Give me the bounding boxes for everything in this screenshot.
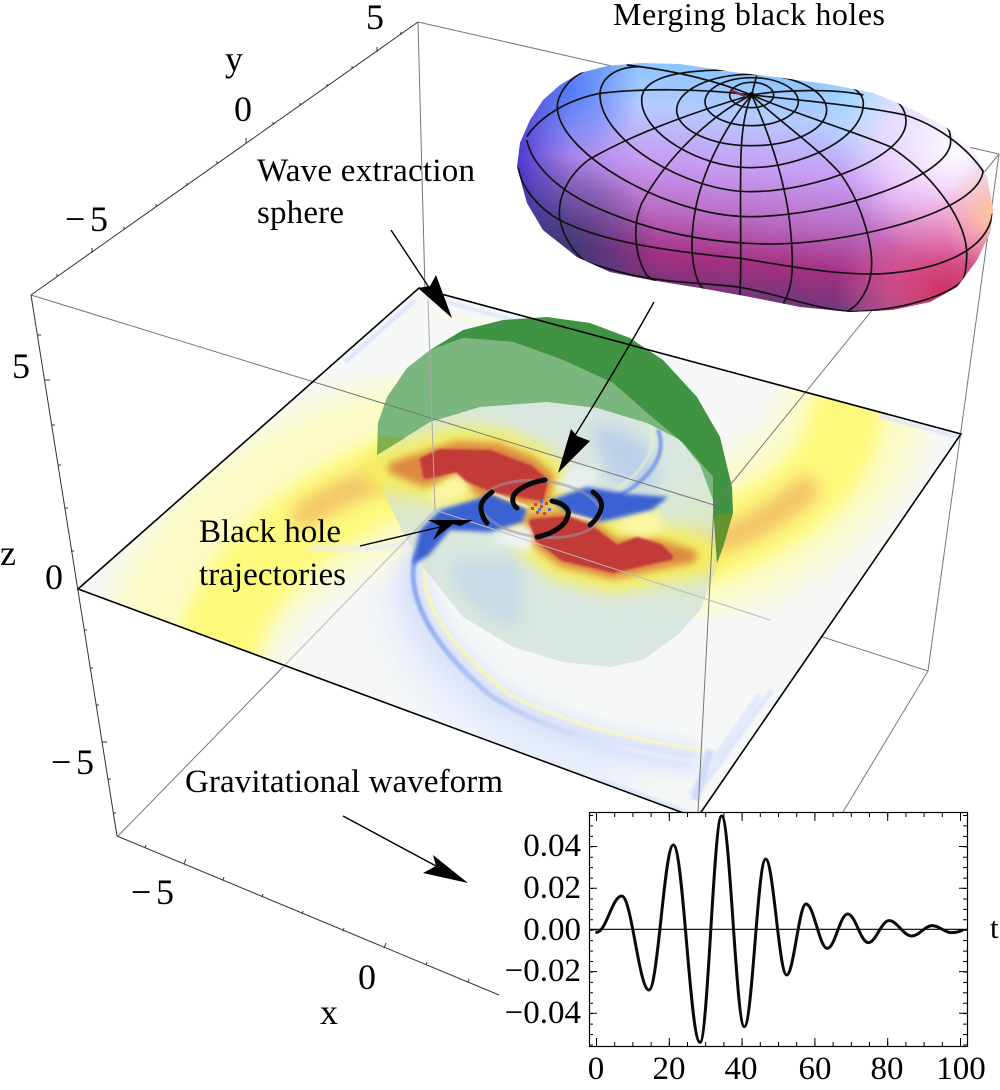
yellow spiral band left [190,395,860,640]
rim lower tip, yellow-green [714,513,733,563]
arrow: to merging black holes centre [558,302,654,473]
z axis [31,295,117,836]
chart frame [590,812,968,1046]
waveform curve [597,816,962,1042]
t axis label: t [990,910,999,945]
yellow halo around red lobes [385,448,700,572]
axis labels: x [320,992,338,1032]
y tick labels: −0.04 [505,995,581,1031]
arrow: to black hole trajectories [360,520,473,546]
3D box: front edges [31,154,999,812]
axis labels: −5 [131,872,174,912]
y tick labels [505,828,581,1031]
inner light green surface [377,338,713,500]
axis labels: 5 [12,346,30,386]
axis labels [0,0,384,1032]
x axis [117,836,499,995]
edge ripple stripes [200,295,958,812]
axis labels: −5 [65,199,108,239]
x tick labels: 20 [652,1051,686,1087]
yellow spiral band right [700,395,860,545]
surface mesh lines [518,65,993,312]
label: wave extraction sphere: sphere [257,195,344,231]
blue lobes [412,487,668,565]
wedge highlights [425,465,665,552]
label: black hole trajectories: trajectories [199,557,346,593]
x tick labels [588,1051,986,1087]
black hole trajectories [478,475,604,543]
label: black hole trajectories [199,514,346,593]
axis labels: y [225,39,243,79]
x tick labels: 60 [798,1051,832,1087]
x tick labels: 80 [870,1051,904,1087]
label: wave extraction sphere: Wave extraction [257,153,475,189]
plane outline [78,288,961,818]
label: gravitational waveform: Gravitational waveform [185,764,503,800]
lower hemisphere translucent overlay [377,402,717,667]
axis labels: z [0,533,16,573]
pale blue regions [387,587,624,780]
y tick labels: 0.00 [523,912,581,948]
axis labels: 0 [234,89,252,129]
3D box: back edges [118,22,999,836]
y tick labels: 0.02 [523,870,581,906]
axis labels: 0 [45,557,63,597]
zero line [589,928,967,930]
waveform chart [505,812,999,1087]
arrow: to gravitational waveform [343,816,468,883]
arrow: to wave extraction sphere [391,230,452,318]
y tick labels: 0.04 [523,828,581,864]
x tick labels: 0 [588,1051,604,1087]
wave extraction sphere [377,317,733,563]
label: black hole trajectories: Black hole [199,514,341,550]
chart ticks [591,815,967,1046]
wave field plane [80,290,960,812]
merger central speckle [531,500,551,515]
black hole merger surface [517,63,993,312]
axis labels: −5 [51,742,94,782]
outer dark green rim [430,317,733,563]
pale ripples inside sphere [450,425,657,630]
y axis [31,22,418,295]
axis labels: 0 [358,957,376,997]
white shear line [492,493,598,522]
spiral ripple arcs [310,540,705,762]
y tick labels: −0.02 [505,953,581,989]
red lobes [423,452,670,570]
x tick labels: 40 [724,1051,758,1087]
x tick labels: 100 [936,1051,986,1087]
label: wave extraction sphere [257,153,475,231]
